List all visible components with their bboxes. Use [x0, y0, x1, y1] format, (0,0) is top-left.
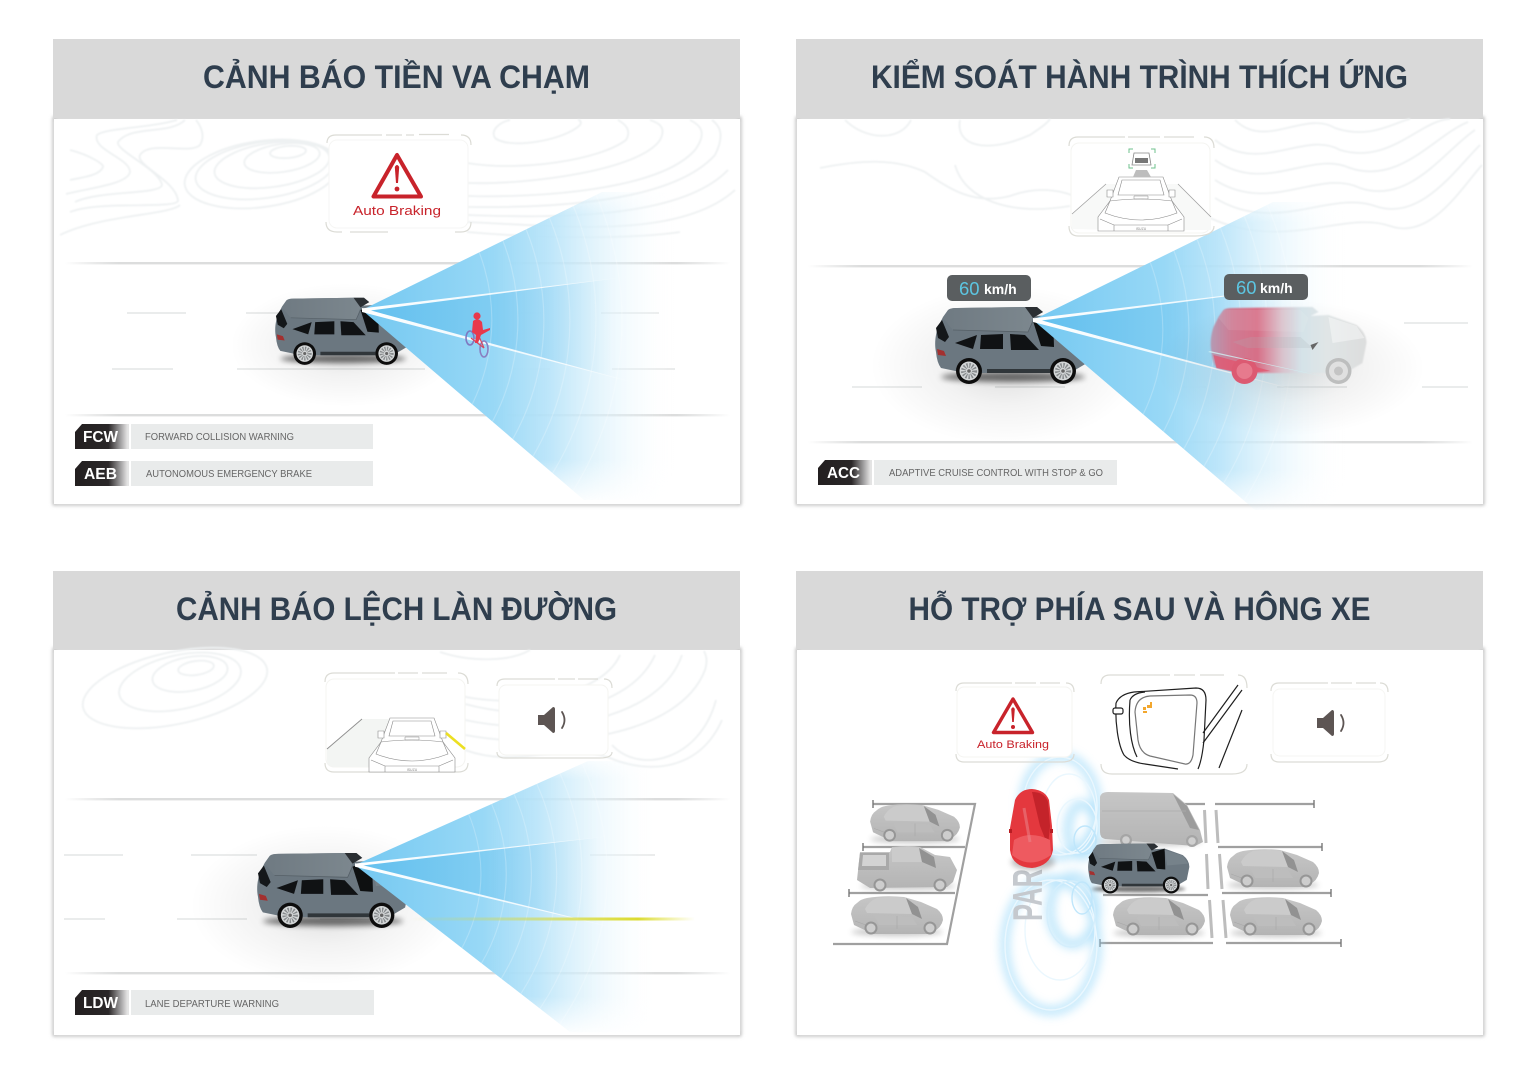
- title: KIỂM SOÁT HÀNH TRÌNH THÍCH ỨNG: [871, 59, 1408, 95]
- sensor beam: [1033, 202, 1345, 510]
- icon: mirror outline: [1113, 685, 1242, 769]
- badge: own speed: 60: [959, 278, 980, 299]
- HUD card: sound alert: [497, 679, 612, 758]
- car: grey pickup truck: [857, 846, 957, 892]
- lead car: tracked vehicle: [1211, 307, 1366, 384]
- HUD card: auto braking: [956, 683, 1074, 762]
- road text: PARKING: PAR: [1004, 869, 1051, 921]
- contour background: [820, 119, 1482, 232]
- label: auto braking: Auto Braking: [977, 739, 1049, 751]
- icon: warning triangle: [374, 155, 421, 196]
- lead car shadow: [1155, 300, 1425, 436]
- HUD card: auto braking: [326, 134, 471, 232]
- HUD card: side mirror: [1101, 675, 1247, 774]
- car: grey parked sedan, left top: [870, 804, 960, 843]
- car shadow: [870, 285, 1140, 445]
- panel: adaptive cruise control: [796, 39, 1483, 510]
- HUD card: sound alert: [1271, 683, 1388, 762]
- contour background: [60, 120, 735, 237]
- icon: cyclist: [466, 312, 490, 357]
- icon: speaker: [1317, 710, 1344, 736]
- car: grey parked sedan, left bottom: [851, 896, 943, 936]
- car: grey parked sedan, right bottom: [1230, 897, 1322, 937]
- car: grey SUV: [257, 853, 409, 928]
- sensor beam: [362, 192, 674, 500]
- car: grey delivery van: [1098, 792, 1203, 847]
- car: grey SUV: [935, 307, 1091, 384]
- lane departure highlight: [410, 918, 695, 920]
- icon: warning triangle: [994, 699, 1032, 732]
- badge: lead car speed: km/h: [1260, 280, 1293, 296]
- header bar: [796, 39, 1483, 118]
- tag: LDW: LDW: [83, 995, 118, 1012]
- car: red passing vehicle: [1009, 789, 1055, 870]
- sensor beam: [355, 761, 658, 1032]
- icon: own car outline: [1098, 177, 1184, 231]
- HUD card: lane view: [325, 673, 468, 772]
- tag: FCW: FCW: [83, 429, 118, 446]
- title: CẢNH BÁO LỆCH LÀN ĐƯỜNG: [176, 591, 617, 627]
- glow: [1005, 756, 1097, 1011]
- tag: LDW: LANE DEPARTURE WARNING: [145, 999, 279, 1010]
- tag: AEB: AEB: [84, 466, 117, 483]
- lane warning line: [446, 733, 465, 749]
- icon: speaker: [538, 707, 564, 733]
- car: grey parked sedan, centre bottom: [1113, 897, 1205, 937]
- icon: lead car bracket: [1129, 149, 1155, 168]
- badge: own speed: [947, 275, 1031, 301]
- icon: car outline: [369, 718, 455, 772]
- car shadow: [190, 825, 460, 985]
- car: grey SUV ego vehicle: [1088, 843, 1189, 893]
- panel: forward collision warning: [53, 39, 740, 504]
- header bar: [53, 571, 740, 649]
- badge: lead car speed: [1224, 274, 1308, 300]
- tag: LDW: [75, 990, 374, 1015]
- badge: lead car speed: 60: [1236, 277, 1257, 298]
- tag: FCW: [75, 424, 373, 449]
- title: CẢNH BÁO TIỀN VA CHẠM: [203, 59, 590, 95]
- beam ray over lead car: [1208, 351, 1330, 378]
- tag: AEB: [75, 461, 373, 486]
- road lines: [64, 798, 730, 974]
- contour background: [76, 633, 722, 767]
- sensor waves: [1005, 756, 1097, 1011]
- title: HỖ TRỢ PHÍA SAU VÀ HÔNG XE: [908, 591, 1370, 627]
- panel: rear and blind spot assist: [796, 571, 1483, 1035]
- HUD card: dashboard view with lead car: [1069, 137, 1214, 236]
- car: grey parked sedan, right top: [1227, 849, 1319, 889]
- tag: ACC: [818, 460, 1117, 485]
- header bar: [796, 571, 1483, 649]
- header bar: [53, 39, 740, 118]
- badge: own speed: km/h: [984, 281, 1017, 297]
- parking bay lines: [833, 800, 1341, 947]
- car shadow: [230, 283, 460, 407]
- car: grey SUV: [275, 298, 411, 365]
- label: auto braking: Auto Braking: [353, 203, 441, 218]
- road lines: [65, 262, 730, 416]
- tag: AEB: AUTONOMOUS EMERGENCY BRAKE: [146, 469, 312, 480]
- tag: ACC: ACC: [827, 465, 860, 482]
- wave rings: [1005, 757, 1097, 1010]
- icon: blind spot indicator: [1143, 702, 1152, 713]
- road lines: [808, 265, 1473, 443]
- tag: FCW: FORWARD COLLISION WARNING: [145, 432, 294, 443]
- tag: ACC: ADAPTIVE CRUISE CONTROL WITH STOP & GO: [889, 468, 1103, 479]
- panel: lane departure warning: [53, 571, 740, 1035]
